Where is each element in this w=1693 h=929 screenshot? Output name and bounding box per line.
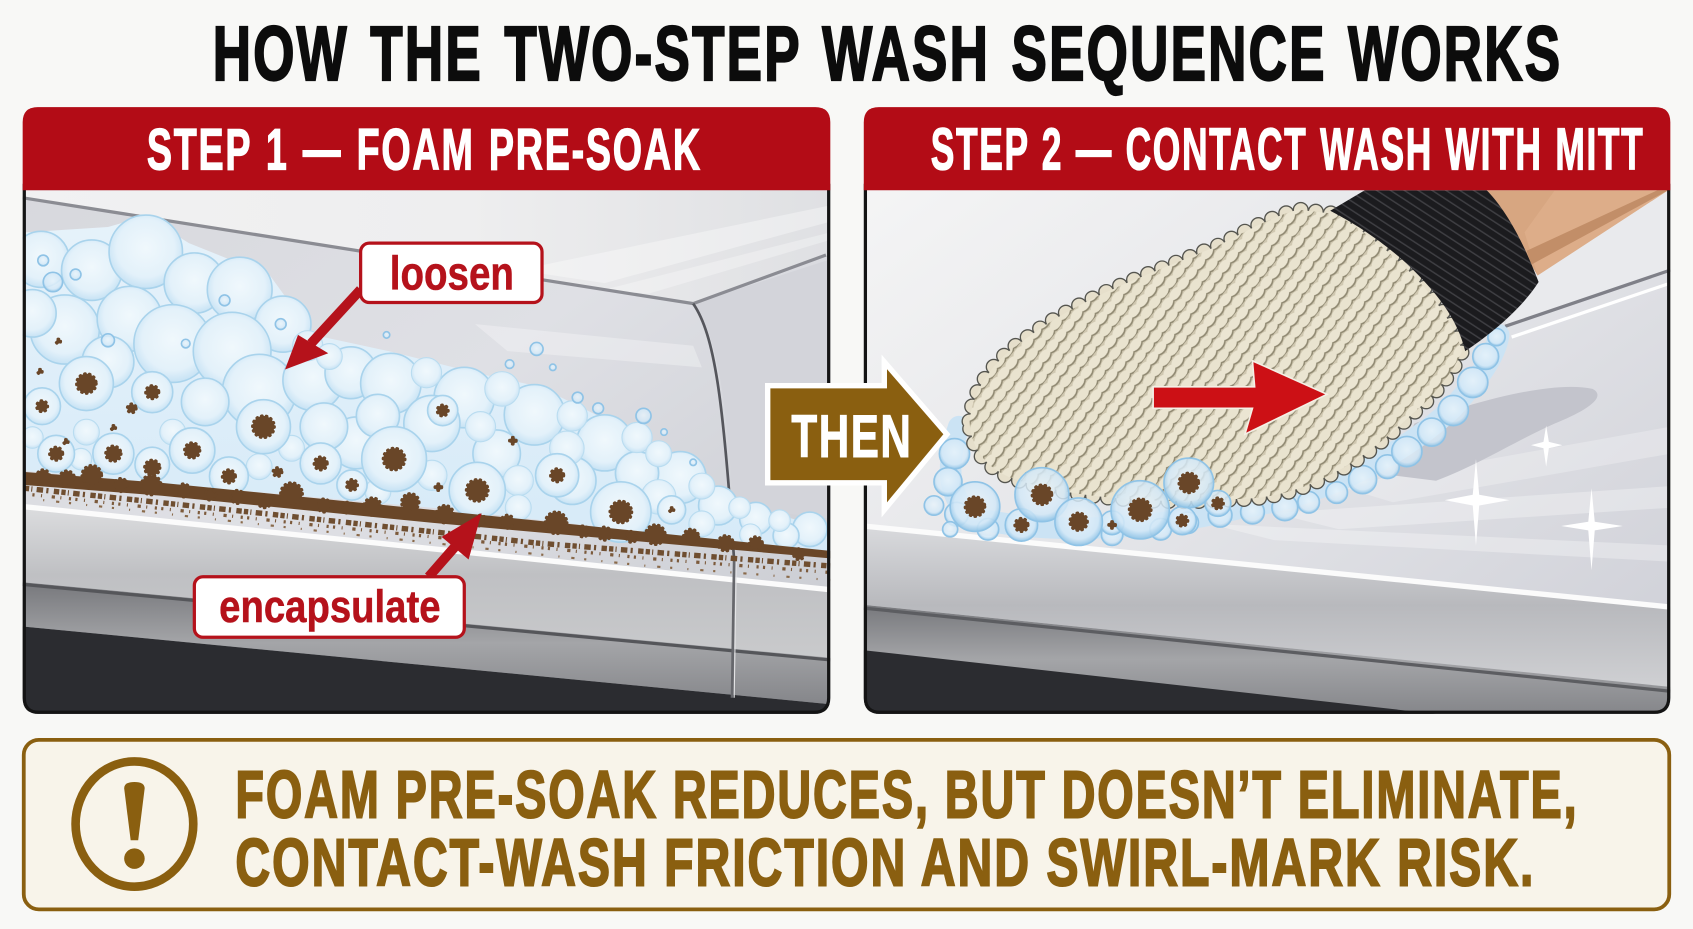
foam mass — [9, 215, 830, 553]
arrow: THEN — [768, 362, 947, 510]
mitt cuff — [1330, 190, 1539, 351]
floating droplets — [38, 255, 696, 466]
sparkles — [1445, 426, 1623, 570]
warning text — [235, 758, 1579, 901]
car surface scene — [864, 190, 1670, 714]
icon: exclamation — [76, 761, 193, 887]
step 1 header: STEP 1 — FOAM PRE-SOAK — [147, 118, 702, 183]
panel 2 frame — [865, 184, 1669, 712]
dirt bubbles under mitt — [950, 458, 1231, 545]
arrow: wipe direction — [1153, 361, 1327, 434]
arrow: loosen — [285, 290, 361, 369]
step 1 header — [23, 107, 830, 190]
callout: warning — [24, 740, 1669, 909]
arrow: encapsulate — [429, 513, 482, 577]
arm — [1487, 190, 1668, 276]
wash mitt — [970, 210, 1462, 501]
panel: step 1 foam pre-soak — [9, 107, 830, 714]
foam rim around mitt — [924, 328, 1505, 545]
car door scene — [22, 190, 830, 714]
panel: step 2 contact wash with mitt — [864, 107, 1670, 714]
callout: loosen: loosen — [390, 248, 514, 301]
panel 1 frame — [24, 184, 829, 712]
dirt layer — [25, 339, 830, 580]
arrow: THEN: THEN — [791, 402, 912, 470]
callout: encapsulate: encapsulate — [219, 581, 441, 632]
